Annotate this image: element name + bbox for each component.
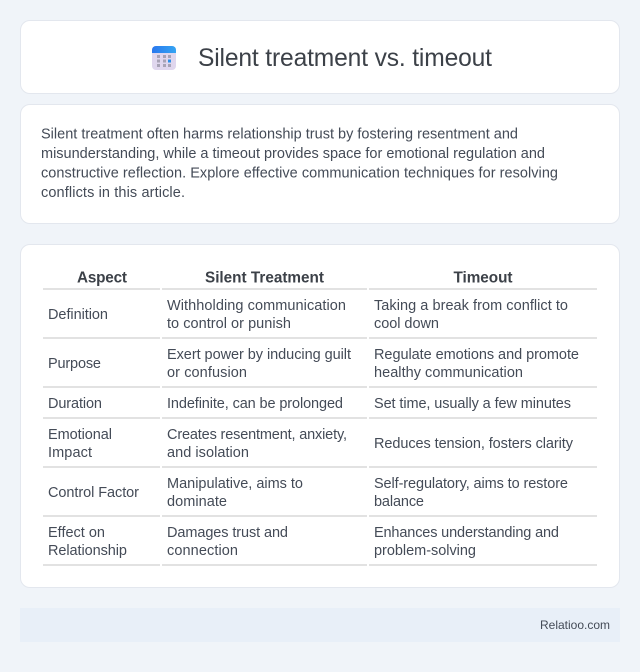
comparison table [43,270,597,566]
footer bar [20,608,620,642]
row: duration: Duration [48,396,102,412]
column heading: silent treatment: Silent Treatment [205,270,324,286]
row: emotional impact: Emotional [48,427,112,443]
row: control factor: dominate [167,494,227,510]
text block: intro paragraph: Silent treatment often harms relationship trust by fostering resentment and [41,126,518,142]
row: definition: cool down [374,316,439,332]
row: effect on relationship: Damages trust and [167,525,288,541]
text block: intro paragraph: constructive reflection. Explore effective communication techniques for resolving [41,166,558,182]
column heading: aspect: Aspect [77,270,127,286]
row: definition [48,298,568,332]
panel: comparison table card [20,244,620,588]
panel: intro card [20,104,620,224]
row: emotional impact: Creates resentment, anxiety, [167,427,347,443]
row: purpose: Regulate emotions and promote [374,347,579,363]
row: emotional impact: Reduces tension, fosters clarity [374,436,574,452]
row: effect on relationship: connection [167,543,238,559]
row: purpose: healthy communication [374,365,523,381]
row: duration [48,396,571,412]
title: Silent treatment vs. timeout [198,45,492,72]
row: effect on relationship: Enhances understanding and [374,525,559,541]
row: control factor: Self-regulatory, aims to restore [374,476,568,492]
row: emotional impact: and isolation [167,445,249,461]
row: emotional impact [48,427,574,461]
row: definition: Withholding communication [167,298,346,314]
row: duration: Set time, usually a few minutes [374,396,571,412]
icon: calendar [152,46,176,70]
row: control factor [48,476,568,510]
row: purpose: Exert power by inducing guilt [167,347,351,363]
footer text: Relatioo.com [540,618,610,632]
column heading: timeout: Timeout [454,270,512,286]
text block: intro paragraph: conflicts in this article. [41,185,185,201]
row: effect on relationship: Relationship [48,543,127,559]
row: control factor: balance [374,494,424,510]
row: purpose: Purpose [48,356,101,372]
row: definition: Definition [48,307,108,323]
row: effect on relationship: Effect on [48,525,105,541]
row: duration: Indefinite, can be prolonged [167,396,343,412]
row: definition: Taking a break from conflict to [374,298,568,314]
row: emotional impact: Impact [48,445,92,461]
row: purpose: or confusion [167,365,247,381]
row: effect on relationship [48,525,559,559]
row: control factor: Manipulative, aims to [167,476,303,492]
row: control factor: Control Factor [48,485,139,501]
panel: title card [20,20,620,94]
row: effect on relationship: problem-solving [374,543,476,559]
row: definition: to control or punish [167,316,291,332]
text block: intro paragraph [41,126,558,201]
text block: intro paragraph: misunderstanding, while a timeout provides space for emotional regulation and [41,146,545,162]
row: purpose [48,347,579,381]
